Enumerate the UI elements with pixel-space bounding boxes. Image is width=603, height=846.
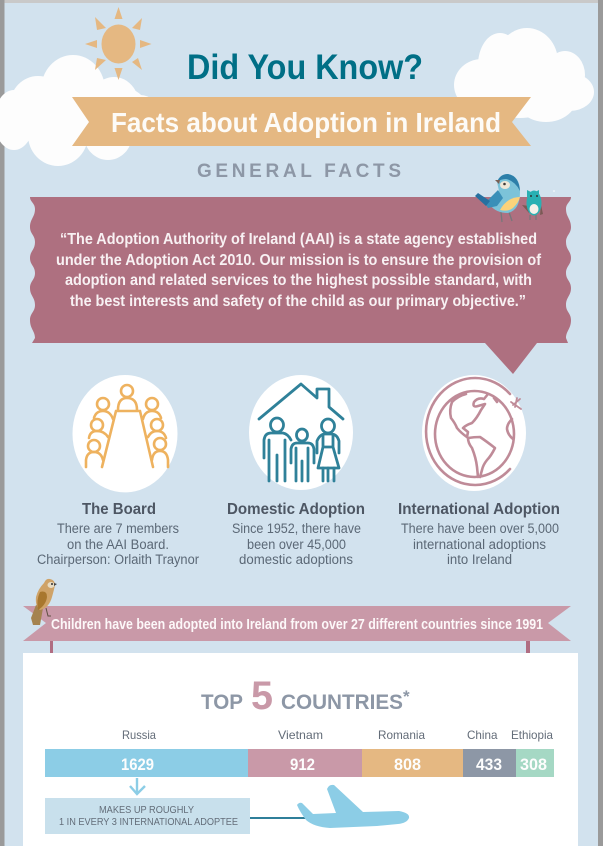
text: board facts: There are 7 members bbox=[57, 521, 179, 536]
bar: china: China bbox=[467, 728, 498, 742]
cloud: left bbox=[0, 55, 160, 166]
bar: russia: Russia bbox=[122, 728, 156, 742]
ribbon: subtitle: Facts about Adoption in Ireland bbox=[111, 107, 501, 138]
callout: one in three: MAKES UP ROUGHLY bbox=[99, 805, 194, 816]
title: Did You Know? bbox=[187, 48, 423, 87]
bar chart: adoptions by country bbox=[45, 728, 554, 777]
heading: top 5 countries bbox=[201, 674, 410, 718]
heading: top 5 countries: * bbox=[403, 687, 410, 706]
cloud: right bbox=[454, 28, 594, 122]
text: international facts: into Ireland bbox=[447, 552, 512, 567]
bar: romania bbox=[362, 728, 463, 777]
bar: romania: Romania bbox=[378, 728, 425, 742]
icon: airplane bbox=[297, 785, 409, 828]
text: board facts bbox=[37, 521, 199, 567]
heading: domestic adoption: Domestic Adoption bbox=[227, 501, 365, 518]
text: domestic facts: been over 45,000 bbox=[247, 537, 346, 552]
icon: family and house bbox=[249, 375, 353, 490]
bar: ethiopia: 308 bbox=[520, 756, 547, 774]
icon: boardroom table bbox=[72, 375, 178, 492]
text: domestic facts bbox=[232, 521, 361, 567]
bar: vietnam: 912 bbox=[290, 756, 315, 774]
quote text bbox=[56, 231, 542, 310]
quote text: adoption and related services to the highest possible standard, with bbox=[65, 272, 532, 289]
panel: top 5 countries bbox=[23, 653, 578, 846]
icon: brown sparrow bbox=[31, 579, 57, 625]
icon: globe and plane bbox=[422, 375, 526, 491]
quote text: under the Adoption Act 2010. Our mission is to ensure the provision of bbox=[56, 252, 542, 269]
panel: mission quote bbox=[30, 197, 571, 374]
heading: the board: The Board bbox=[82, 501, 156, 518]
callout: one in three: 1 IN EVERY 3 INTERNATIONAL ADOPTEE bbox=[59, 817, 238, 828]
quote text: “The Adoption Authority of Ireland (AAI) is a state agency established bbox=[60, 231, 537, 248]
text: international facts: international adoptions bbox=[413, 537, 546, 552]
bar: romania: 808 bbox=[394, 756, 421, 774]
icon: teal chick bbox=[522, 190, 543, 220]
heading: top 5 countries: TOP bbox=[201, 691, 243, 714]
heading: international adoption: International Adoption bbox=[398, 501, 560, 518]
bar: ethiopia: Ethiopia bbox=[511, 728, 553, 742]
callout: one in three bbox=[45, 798, 250, 834]
quote text: the best interests and safety of the child as our primary objective.” bbox=[70, 293, 526, 310]
text: domestic facts: Since 1952, there have bbox=[232, 521, 361, 536]
text: board facts: Chairperson: Orlaith Traynor bbox=[37, 552, 199, 567]
bar: russia bbox=[45, 728, 248, 777]
panel: the board bbox=[37, 375, 199, 567]
heading: top 5 countries: COUNTRIES bbox=[281, 691, 403, 714]
panel: international adoption bbox=[398, 375, 560, 567]
bar: vietnam: Vietnam bbox=[278, 728, 323, 742]
text: domestic facts: domestic adoptions bbox=[239, 552, 353, 567]
heading: top 5 countries: 5 bbox=[251, 674, 273, 718]
arrow: russia to callout bbox=[130, 778, 145, 794]
icon: sun bbox=[85, 7, 152, 80]
text: international facts bbox=[401, 521, 559, 567]
heading: general facts: GENERAL FACTS bbox=[197, 161, 401, 182]
bar: china bbox=[463, 728, 516, 777]
banner: countries since 1991 bbox=[23, 606, 571, 654]
text: international facts: There have been over 5,000 bbox=[401, 521, 559, 536]
bar: russia: 1629 bbox=[121, 756, 154, 774]
icon: blue bird bbox=[475, 174, 520, 222]
ribbon: subtitle bbox=[72, 97, 531, 146]
bar: china: 433 bbox=[476, 756, 502, 774]
panel: domestic adoption bbox=[227, 375, 365, 567]
bar: vietnam bbox=[248, 728, 362, 777]
text: board facts: on the AAI Board. bbox=[67, 537, 169, 552]
bar: ethiopia bbox=[511, 728, 554, 777]
